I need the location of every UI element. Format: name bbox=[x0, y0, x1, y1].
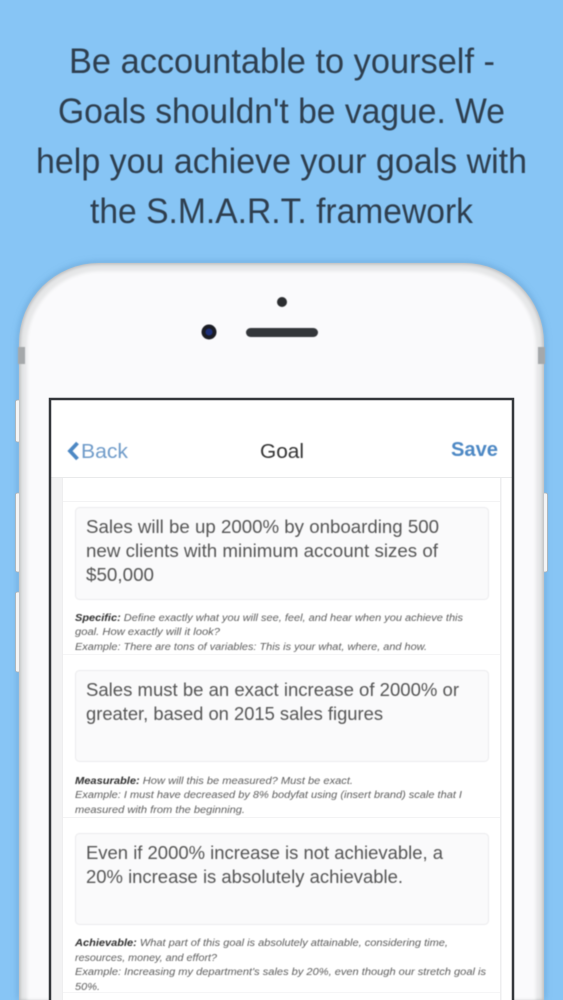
achievable hint: Example: Increasing my department's sales by 20%, even though our stretch goal is bbox=[75, 967, 486, 978]
front camera bbox=[202, 324, 216, 340]
measurable hint: Example: I must have decreased by 8% bodyfat using (insert brand) scale that I bbox=[75, 790, 462, 801]
achievable hint bbox=[74, 938, 486, 993]
title: Goals shouldn't be vague. We bbox=[58, 92, 505, 131]
specific input: Sales will be up 2000% by onboarding 500 bbox=[86, 517, 439, 537]
back button: Back bbox=[81, 440, 129, 463]
achievable hint: resources, money, and effort? bbox=[75, 953, 218, 964]
specific input: new clients with minimum account sizes of bbox=[86, 541, 439, 561]
measurable hint bbox=[75, 776, 462, 816]
content edges bbox=[62, 478, 502, 1000]
save button: Save bbox=[451, 438, 498, 461]
side buttons bbox=[16, 400, 548, 672]
nav bar bbox=[70, 438, 498, 463]
measurable input: greater, based on 2015 sales figures bbox=[86, 704, 383, 724]
title bbox=[36, 42, 527, 231]
phone rim bbox=[20, 264, 542, 1000]
nav divider bbox=[51, 477, 512, 478]
achievable input: Even if 2000% increase is not achievable, a bbox=[86, 843, 444, 863]
achievable input bbox=[76, 834, 488, 924]
specific hint bbox=[75, 613, 463, 653]
antenna bands bbox=[18, 347, 545, 364]
front sensor bbox=[277, 297, 287, 307]
title: Be accountable to yourself - bbox=[69, 42, 495, 81]
phone front face bbox=[27, 271, 536, 1000]
specific input: $50,000 bbox=[86, 565, 154, 585]
speaker bbox=[246, 328, 318, 337]
measurable input bbox=[76, 670, 488, 762]
measurable hint: measured with from the beginning. bbox=[75, 805, 245, 816]
measurable input: Sales must be an exact increase of 2000% or bbox=[86, 680, 459, 700]
achievable hint: Achievable: What part of this goal is absolutely attainable, considering time, bbox=[74, 938, 448, 949]
title: the S.M.A.R.T. framework bbox=[90, 192, 473, 231]
specific input bbox=[76, 508, 488, 600]
left gutter bbox=[52, 478, 62, 1000]
measurable hint: Measurable: How will this be measured? Must be exact. bbox=[75, 776, 353, 787]
screen border bbox=[50, 399, 513, 1000]
achievable input: 20% increase is absolutely achievable. bbox=[86, 867, 403, 887]
nav title: Goal bbox=[260, 440, 304, 463]
screen surface bbox=[50, 399, 513, 1000]
achievable hint: 50%. bbox=[75, 982, 100, 993]
phone bbox=[16, 262, 548, 1000]
specific hint: Specific: Define exactly what you will see, feel, and hear when you achieve this bbox=[75, 613, 463, 624]
specific hint: Example: There are tons of variables: This is your what, where, and how. bbox=[75, 642, 427, 653]
phone body bbox=[19, 263, 544, 1000]
title: help you achieve your goals with bbox=[36, 142, 527, 181]
phone shadow bbox=[18, 262, 545, 1000]
screen bbox=[50, 399, 513, 1000]
specific hint: goal. How exactly will it look? bbox=[75, 627, 221, 638]
back chevron bbox=[70, 443, 78, 459]
